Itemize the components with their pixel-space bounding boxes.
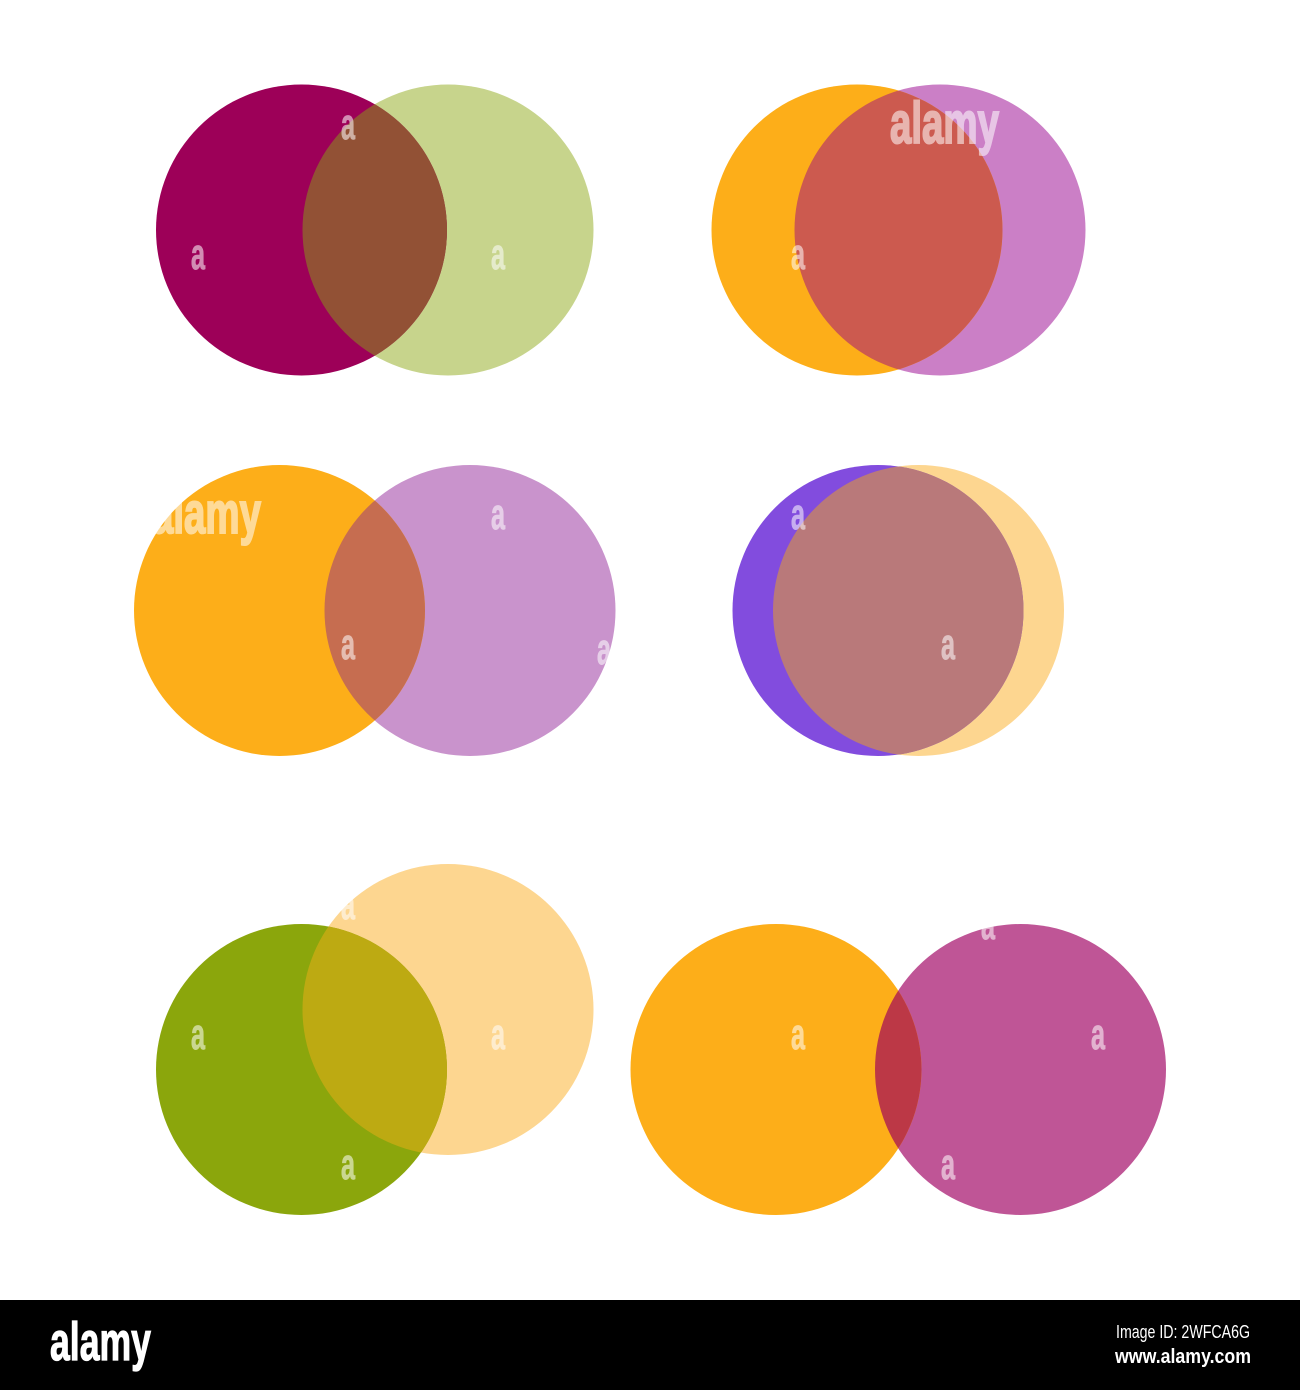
image id: Image ID: 2WFCA6G	[1116, 1322, 1250, 1342]
watermark text: a	[1091, 1010, 1105, 1059]
footer bar	[0, 1300, 1300, 1390]
watermark text: a	[941, 620, 955, 669]
watermark text: a	[791, 490, 805, 539]
venn pair: violet and pale orange	[732, 465, 1064, 756]
watermark text: a	[491, 490, 505, 539]
venn pair: orange and orchid	[712, 84, 1086, 376]
watermark text: alamy	[890, 91, 999, 156]
watermark text: a	[791, 1010, 805, 1059]
venn pair: orange and lilac	[134, 465, 616, 756]
watermark text	[152, 91, 1105, 1189]
watermark text: a	[597, 625, 611, 674]
footer logo: alamy	[50, 1312, 151, 1372]
watermark text: a	[341, 100, 355, 149]
watermark text: a	[941, 1140, 955, 1189]
watermark text: alamy	[152, 481, 261, 546]
venn pair: crimson and pale green	[156, 84, 594, 376]
watermark text: a	[491, 230, 505, 279]
watermark text: a	[191, 1010, 205, 1059]
watermark text: a	[791, 230, 805, 279]
watermark text: a	[491, 1010, 505, 1059]
watermark text: a	[341, 620, 355, 669]
watermark text: a	[341, 880, 355, 929]
website: www.alamy.com	[1114, 1346, 1251, 1368]
venn pair: orange and magenta	[630, 924, 1166, 1215]
watermark text: a	[341, 1140, 355, 1189]
watermark text: a	[981, 900, 995, 949]
venn pair: olive green and pale orange	[156, 864, 594, 1215]
watermark text: a	[191, 230, 205, 279]
